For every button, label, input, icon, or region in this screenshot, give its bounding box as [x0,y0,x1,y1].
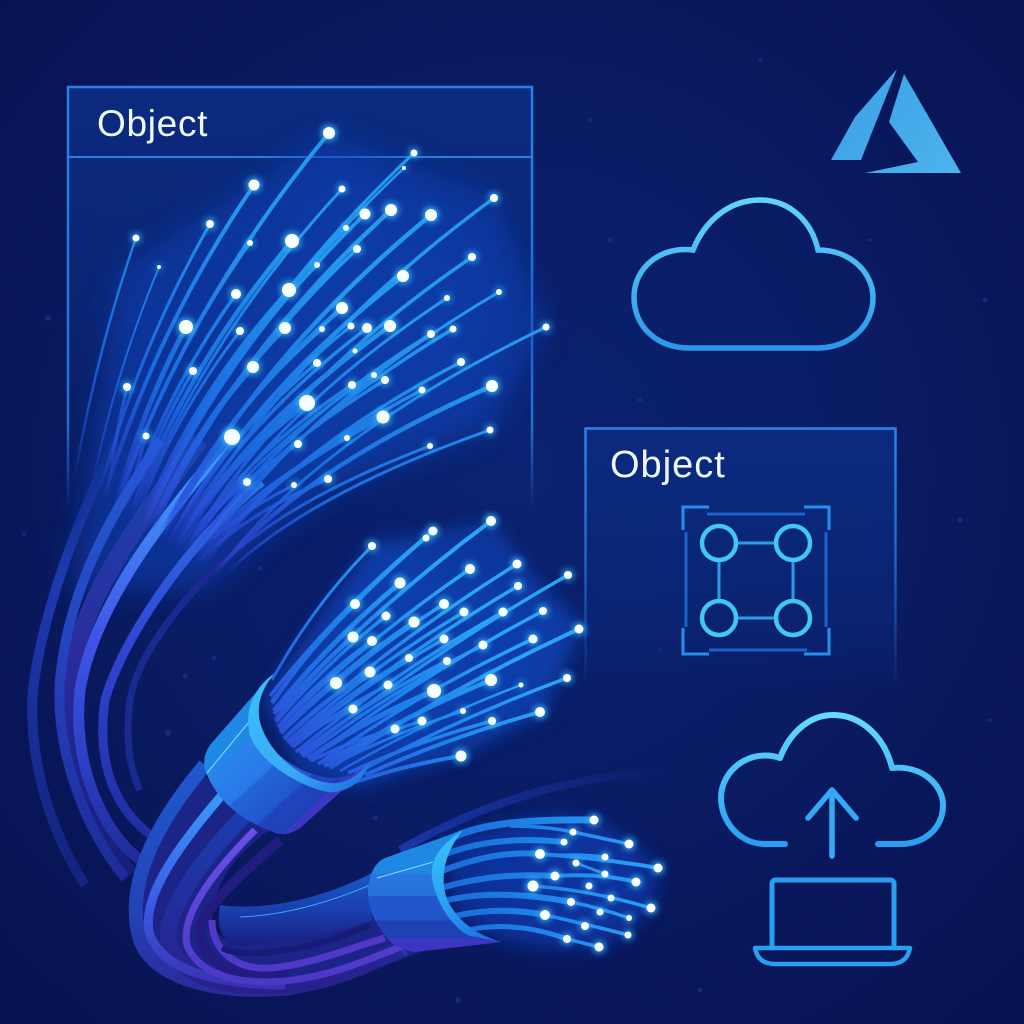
panel: second object panel [585,428,896,690]
lower fiber fan [441,820,658,947]
top fiber tips [123,127,550,488]
sleeve highlight [377,862,433,878]
connector: middle sleeve [204,673,370,834]
connector: lower sleeve [368,830,502,952]
icon: cloud upload with laptop [721,715,943,964]
sleeve ring [248,673,370,792]
top fiber fan [60,133,546,575]
panel: top object panel [68,86,532,510]
lower fiber tips [528,816,662,952]
glow behind lower fibers [445,820,660,948]
icon: object graph [683,507,829,654]
middle fiber tips [330,516,584,762]
middle fiber fan [270,521,579,782]
heading: top panel label: Object [97,103,208,144]
icon: cloud [634,200,873,348]
glow behind top fibers [70,135,545,590]
heading: second panel label: Object [610,444,726,486]
highlight line on band [240,885,370,917]
upper band into lower connector [219,873,372,945]
sleeve ring [432,830,502,942]
icon: azure logo [831,69,961,173]
sleeve highlight [207,722,249,773]
glow behind middle fibers [262,521,580,785]
lower cable body [132,765,670,993]
upper cable strands [32,420,290,885]
